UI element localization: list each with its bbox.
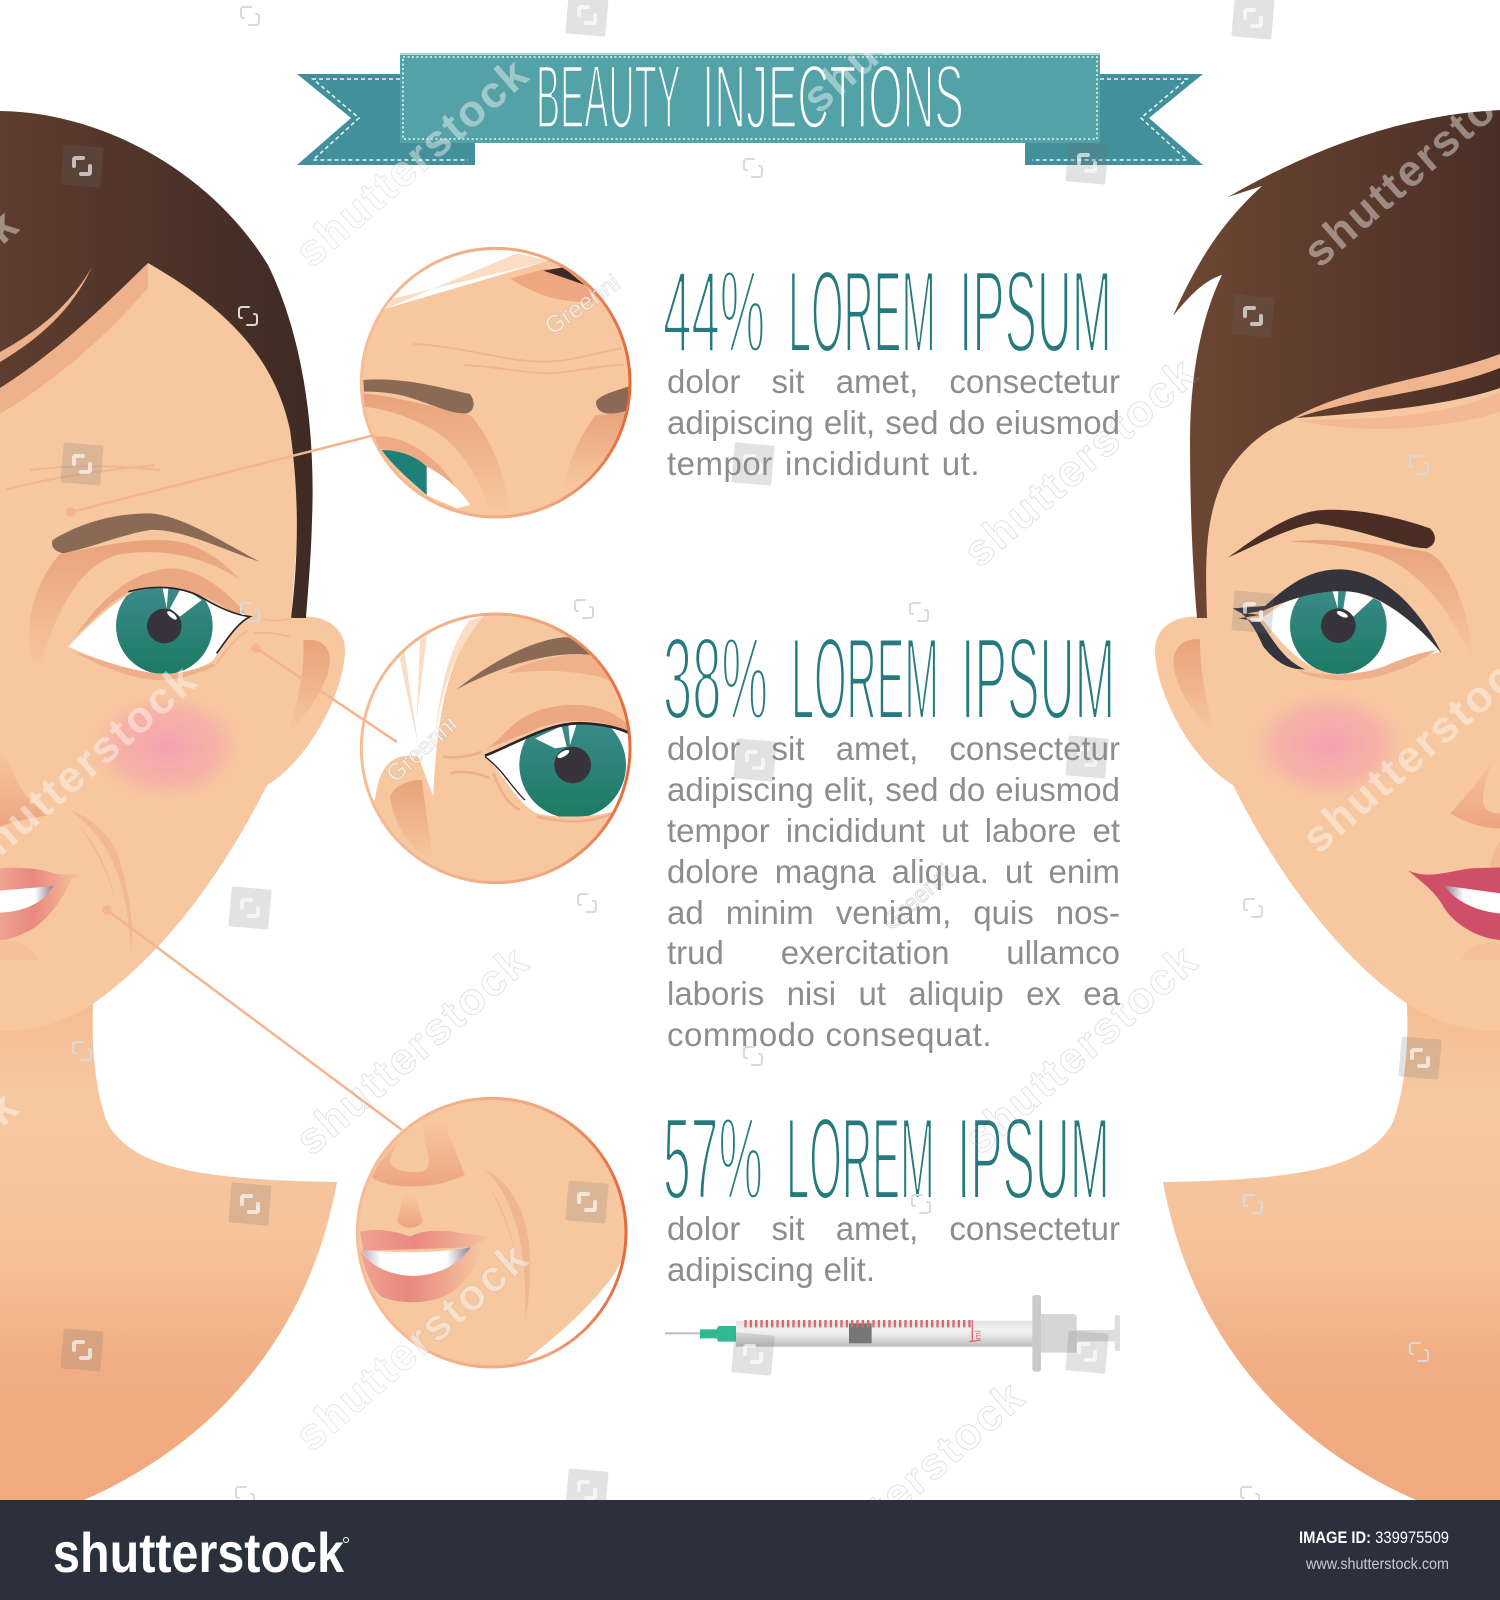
right eyeliner [1233, 569, 1442, 669]
footer image id: IMAGE ID: 339975509 [1299, 1528, 1449, 1547]
right chin shadow [1462, 942, 1500, 960]
left face: aged woman [0, 111, 345, 1500]
diagonal watermarks: Greenni [877, 859, 959, 936]
body text: 38%: tempor incididunt ut labore et [667, 812, 1120, 849]
philtrum [398, 1202, 422, 1228]
right hairline shadow [1296, 392, 1500, 429]
plunger end [1115, 1315, 1120, 1351]
one millilitre mark: ml [973, 1330, 983, 1339]
heading: 57% [663, 1092, 1110, 1225]
left hair [0, 111, 313, 618]
heading: 44%: LOREM [788, 247, 936, 377]
heading: 38%: 38% [663, 614, 768, 745]
left blush [80, 685, 253, 808]
lower lip [360, 1240, 483, 1302]
needle hub [700, 1326, 736, 1342]
circle: crow's feet [360, 612, 632, 884]
needle [665, 1332, 702, 1334]
right hair highlight strand [1290, 354, 1500, 420]
white hair area [385, 250, 548, 309]
line to eye circle [252, 644, 397, 742]
iris [382, 450, 427, 495]
left brow [363, 379, 474, 413]
eye white [427, 467, 470, 508]
left eyebrow [52, 513, 259, 562]
body text: 57%: adipiscing elit. [667, 1251, 875, 1288]
body text: 38%: dolore magna aliqua. ut enim [667, 853, 1120, 890]
skin background [374, 616, 628, 882]
rod [1073, 1330, 1117, 1341]
brow shadow [29, 540, 240, 673]
right lips [1408, 867, 1500, 940]
diagonal watermarks: shutterstock [286, 1233, 537, 1461]
diagonal watermarks: shutterstock [286, 937, 537, 1165]
plunger seal [849, 1323, 872, 1343]
left chin shadow [0, 940, 38, 960]
body text: 38%: dolor sit amet, consectetur [667, 730, 1120, 767]
smile lines [483, 1168, 530, 1320]
hair strands [400, 617, 483, 767]
footer bar [0, 1500, 1500, 1600]
left ear shading [287, 640, 330, 737]
one millilitre mark [969, 1320, 983, 1342]
banner stitching [313, 57, 1187, 160]
callout lines [68, 435, 402, 1130]
title [536, 45, 964, 148]
wrinkles [443, 752, 613, 821]
left nose [0, 747, 49, 827]
ear shading [390, 780, 430, 846]
body text: 38%: commodo consequat. [667, 1016, 992, 1053]
eyelid [374, 436, 457, 488]
left hair highlight strand [0, 267, 92, 362]
diagonal watermarks: shutterstock [782, 1372, 1033, 1600]
body text: 38%: adipiscing elit, sed do eiusmod [667, 771, 1120, 808]
left forehead wrinkles [5, 465, 160, 490]
body text: 44%: adipiscing elit, sed do eiusmod [667, 404, 1120, 441]
line to forehead circle [68, 435, 375, 516]
right ribbon tail [1025, 74, 1203, 165]
nose [372, 1136, 465, 1186]
right brow shadow [1290, 540, 1473, 660]
left lips [0, 868, 83, 940]
right lower lid [1297, 650, 1437, 680]
body text: 57% [667, 1210, 1120, 1288]
diagonal watermarks: shutterstock [286, 1233, 537, 1461]
heading: 38%: IPSUM [961, 613, 1115, 744]
hair tip [543, 267, 585, 285]
skin background [358, 1100, 624, 1366]
right face: young woman [1155, 110, 1500, 1500]
heading: 38%: LOREM [791, 614, 939, 744]
right forehead skin [1200, 360, 1500, 640]
circle: smile lines [356, 1096, 628, 1368]
left crow's feet [217, 618, 293, 663]
footer logo: shutterstock [53, 1521, 345, 1584]
right ear shading [1173, 639, 1217, 737]
diagonal watermarks: shutterstock [955, 936, 1206, 1164]
diagonal watermarks: Greenni [540, 269, 625, 340]
eye [484, 722, 628, 817]
hairline shading [510, 268, 593, 302]
diagonal watermarks: shutterstock [286, 49, 537, 277]
barrel [736, 1321, 1033, 1347]
syringe [665, 1295, 1120, 1372]
circle outline [357, 1098, 626, 1367]
upper lip [360, 1230, 497, 1251]
wrinkles [413, 344, 623, 373]
flange [1032, 1295, 1041, 1372]
title: BEAUTY [536, 45, 681, 148]
circle: forehead wrinkles [360, 246, 632, 518]
heading: 57%: IPSUM [957, 1093, 1110, 1224]
right blush [1240, 683, 1417, 807]
line to mouth circle [104, 906, 402, 1130]
right facial features [1173, 510, 1500, 960]
circle outline [361, 248, 630, 517]
left hairline shadow [0, 263, 148, 414]
eyelid [483, 705, 628, 750]
flange collar [1041, 1314, 1077, 1353]
brow shadow left [364, 394, 506, 490]
heading: 44% [663, 246, 1112, 378]
diagonal watermarks: shutterstock [286, 49, 537, 277]
right eye [1262, 591, 1440, 674]
right hair [1173, 110, 1500, 618]
footer registered mark [344, 1538, 348, 1542]
white background corner [524, 1263, 621, 1362]
skin background [362, 261, 628, 516]
heading: 38% [663, 613, 1115, 745]
left eyelid [75, 568, 245, 637]
heading: 57%: LOREM [786, 1092, 935, 1224]
left lower lid [70, 650, 217, 680]
heading: 44%: 44% [663, 247, 765, 378]
right head skin and ear [1155, 250, 1500, 1031]
left teeth [0, 886, 53, 913]
left facial features [0, 513, 330, 960]
footer url: www.shutterstock.com [1305, 1556, 1449, 1573]
banner [297, 45, 1203, 165]
right neck and shoulder [1163, 990, 1500, 1500]
left eye [68, 578, 250, 674]
right teeth [1445, 886, 1500, 913]
left neck and shoulder [0, 990, 337, 1500]
body text: 38% [667, 730, 1120, 1053]
circle outline [361, 614, 630, 883]
banner main band [400, 53, 1100, 143]
left ribbon tail [297, 74, 475, 165]
title: INJECTIONS [702, 47, 964, 148]
white hair and background [362, 616, 484, 800]
brow shadow [507, 655, 613, 682]
right eyebrow [1228, 510, 1435, 557]
right nose [1450, 747, 1500, 828]
body text: 44%: tempor incididunt ut. [667, 445, 980, 482]
heading: 57%: 57% [663, 1095, 763, 1225]
body text: 38%: ad minim veniam, quis nos- [667, 894, 1120, 931]
diagonal watermarks: shutterstock [954, 349, 1205, 577]
body text: 38%: trud exercitation ullamco [667, 934, 1120, 971]
body text: 38%: laboris nisi ut aliquip ex ea [667, 975, 1120, 1012]
right brow [596, 387, 628, 413]
eyebrow [457, 637, 592, 689]
heading: 44%: IPSUM [959, 246, 1112, 377]
body text: 44% [667, 363, 1120, 482]
left laugh lines [70, 810, 132, 953]
body text: 44%: dolor sit amet, consectetur [667, 363, 1120, 400]
brow shadow right [567, 411, 626, 472]
body text: 57%: dolor sit amet, consectetur [667, 1210, 1120, 1247]
right philtrum [1490, 842, 1500, 868]
diagonal watermarks: Greenni [381, 711, 463, 788]
teeth [362, 1247, 471, 1276]
left head skin and ear [0, 250, 345, 1031]
scale ticks [744, 1313, 972, 1335]
